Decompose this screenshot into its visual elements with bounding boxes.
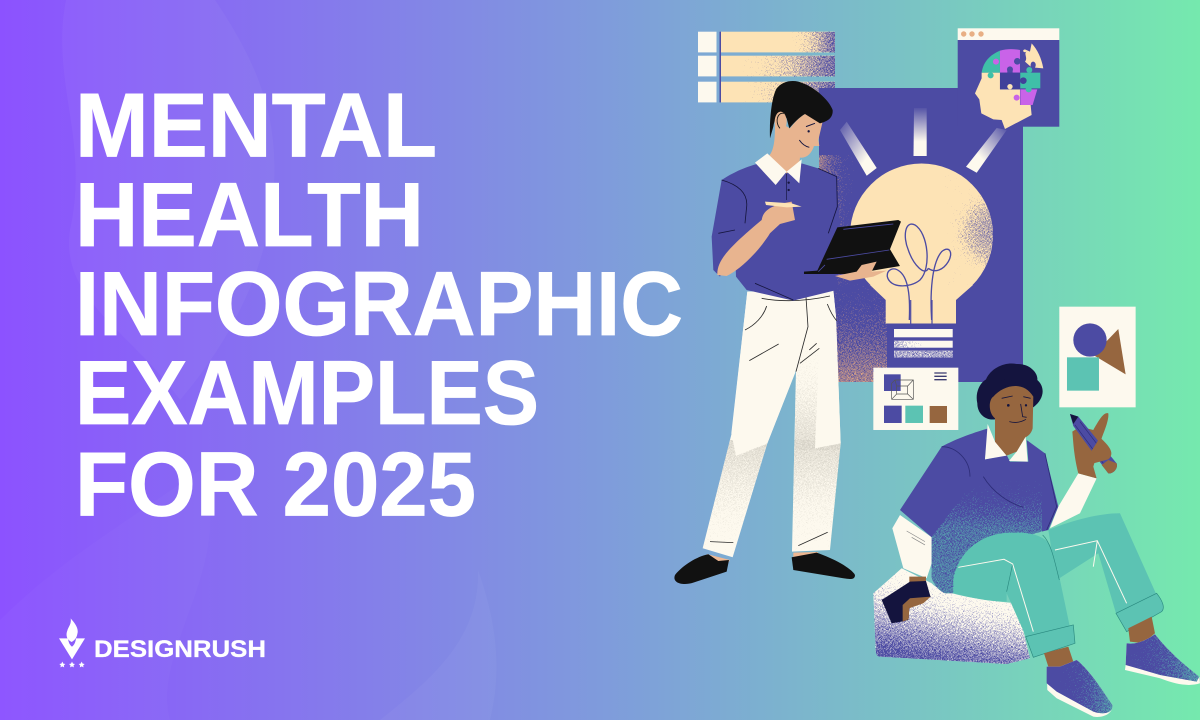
logo: DesignRush <box>59 618 266 667</box>
man upper body <box>712 81 901 301</box>
title: HEALTH <box>75 165 424 266</box>
panel: swatch card <box>873 368 958 430</box>
title: MENTAL <box>75 76 437 177</box>
man face <box>768 113 823 173</box>
man hair <box>770 81 833 138</box>
man shoes <box>674 552 855 584</box>
man arm and hand <box>717 202 795 276</box>
bean bag seat <box>873 568 1038 665</box>
seated man raised hand with pencil <box>1070 413 1117 478</box>
seated man head <box>977 363 1043 462</box>
man collar <box>755 153 802 185</box>
panel: list with three bars <box>698 32 835 102</box>
title: EXAMPLES <box>75 343 539 444</box>
title: INFOGRAPHIC <box>75 254 683 355</box>
seated man hand with wallet <box>882 577 931 623</box>
seated man white sleeves <box>892 473 1097 578</box>
title: FOR 2025 <box>75 435 476 536</box>
man trousers <box>702 290 841 558</box>
icon: puzzle head <box>975 43 1043 129</box>
icon: light bulb <box>850 164 993 324</box>
tablet <box>804 220 901 274</box>
icon: flame and V shield <box>59 618 85 667</box>
icon: light rays <box>840 108 1007 176</box>
title <box>75 76 683 536</box>
panel: large purple backdrop <box>819 88 1023 382</box>
illustration: standing man <box>674 81 901 584</box>
illustration: seated man <box>873 363 1200 720</box>
seated man trousers <box>953 513 1163 670</box>
bulb filament <box>887 224 951 320</box>
panel: window with puzzle head <box>958 28 1059 129</box>
logo wordmark: DESIGNRUSH <box>94 636 266 663</box>
icon: bulb base <box>894 329 953 357</box>
panel: shapes card <box>1059 307 1136 407</box>
seated man shoes <box>1047 632 1200 720</box>
seated man sweater <box>900 428 1058 600</box>
